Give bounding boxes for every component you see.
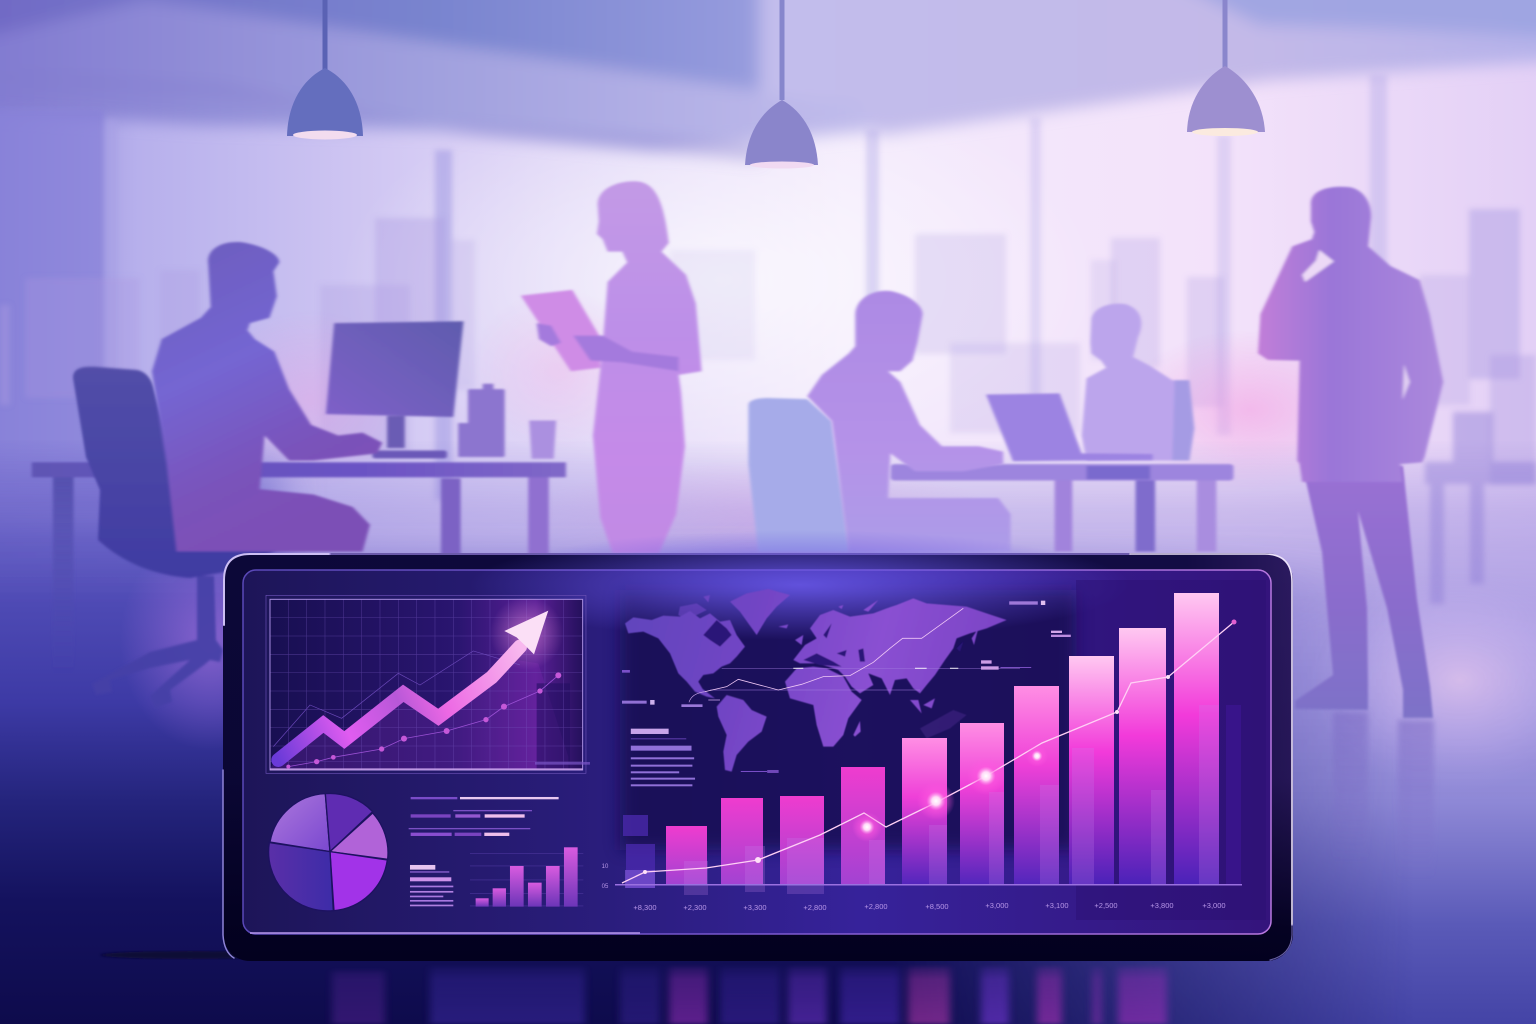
desk: left with monitor <box>32 321 566 675</box>
chair: centre <box>748 398 849 552</box>
axis labels: +3,000 <box>1202 901 1226 910</box>
ceiling <box>0 0 1536 160</box>
glow: behind chair <box>120 530 300 750</box>
chair: left <box>73 367 300 708</box>
background dim bars <box>623 705 1241 888</box>
axis labels: +3,800 <box>1150 901 1174 910</box>
glow: window light <box>340 80 1100 480</box>
South America <box>717 695 767 772</box>
screen bottom glow edge <box>250 932 640 934</box>
ghost trend line <box>273 651 520 747</box>
background desk: right <box>1425 412 1536 604</box>
axis labels <box>602 864 1226 912</box>
pendant lamp: right <box>1187 0 1265 136</box>
Eurasia <box>793 598 1007 695</box>
torso <box>1258 187 1443 482</box>
bar chart: growth <box>615 593 1242 895</box>
desk: centre with laptop <box>890 393 1234 552</box>
chair base <box>92 576 223 708</box>
legs <box>1295 464 1433 718</box>
main bars <box>666 826 707 885</box>
reflection of feet <box>1333 712 1434 880</box>
tablet held <box>521 290 600 371</box>
city skyline <box>0 209 1536 485</box>
axis labels: +2,800 <box>803 903 827 912</box>
Africa <box>785 667 862 747</box>
tablet screen <box>243 570 1271 934</box>
legend text bars <box>409 797 559 906</box>
panel: arrow growth chart <box>266 595 590 773</box>
rising arrow <box>278 597 563 760</box>
pendant lamp: centre <box>745 0 818 168</box>
left wall shade <box>0 110 104 510</box>
islands <box>703 595 978 737</box>
laptop <box>986 393 1153 461</box>
map callout labels <box>622 601 1071 773</box>
pie chart <box>269 793 388 911</box>
secondary trend line with dots <box>286 672 561 769</box>
mini bar chart <box>470 847 583 907</box>
dashboard tablet <box>223 530 1293 961</box>
Greenland <box>730 589 790 635</box>
person: seated centre man <box>807 291 1011 552</box>
axis labels: +8,500 <box>925 902 949 911</box>
monitor <box>326 321 464 417</box>
tablet rim highlights <box>223 554 1292 960</box>
seas <box>703 620 963 667</box>
map route line <box>689 608 1020 702</box>
axis labels: +2,500 <box>1094 901 1118 910</box>
axis labels: 10 <box>602 864 609 870</box>
world map <box>625 589 1007 772</box>
tablet bezel <box>223 553 1293 961</box>
glow: pink haze <box>210 290 1380 580</box>
translucent overlay bars <box>684 705 1219 895</box>
axis labels: +2,300 <box>683 903 707 912</box>
window posts <box>103 75 1387 500</box>
floor: right light <box>0 440 1536 1024</box>
axis labels: +8,300 <box>633 903 657 912</box>
trend line with glow points <box>622 620 1236 883</box>
reflection on floor <box>332 966 1167 1024</box>
map info text bars <box>631 729 695 786</box>
person: standing woman with tablet <box>521 181 702 553</box>
pendant lamp: left <box>287 0 363 140</box>
axis labels: +3,100 <box>1045 901 1069 910</box>
North America <box>625 611 745 698</box>
glow: right floor <box>1310 570 1536 790</box>
person: seated back figure <box>1082 304 1194 461</box>
axis labels: +3,000 <box>985 901 1009 910</box>
desk items <box>458 384 556 459</box>
baseline <box>615 884 1242 886</box>
person: standing man on phone <box>1258 187 1443 880</box>
person: seated left man <box>152 242 382 552</box>
floor: left dark <box>0 449 1376 1024</box>
axis labels: 05 <box>602 884 609 890</box>
axis labels: +3,300 <box>743 903 767 912</box>
axis labels: +2,800 <box>864 902 888 911</box>
shadow under tablet <box>100 951 280 959</box>
